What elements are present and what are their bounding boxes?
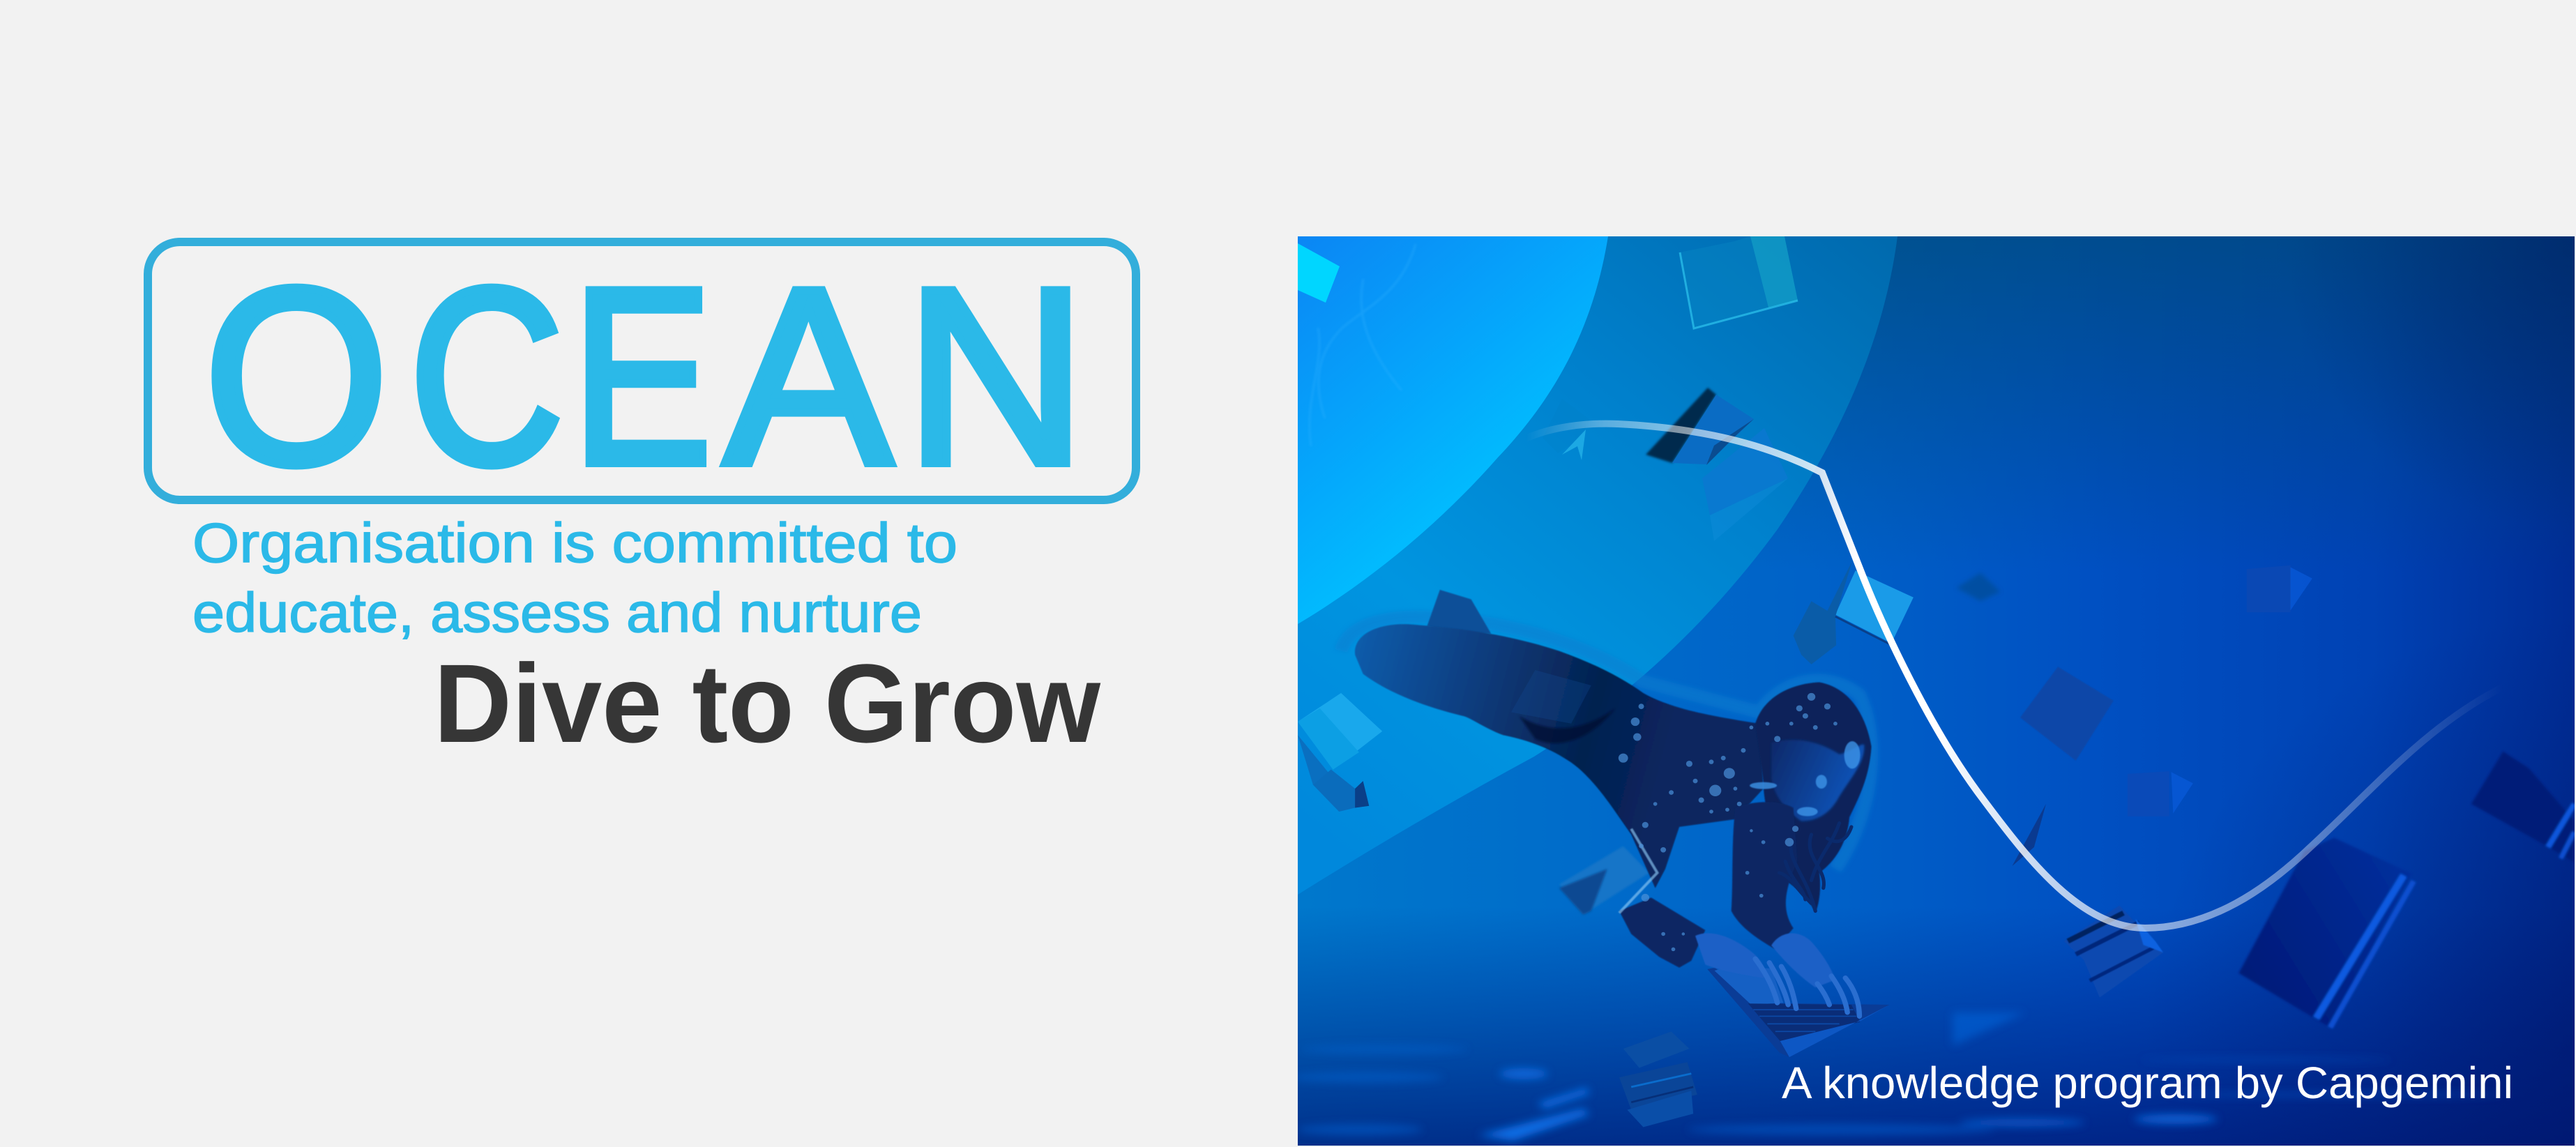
icon: faint book shard [1562, 430, 1586, 460]
caption: knowledge program: A knowledge program by Capgemini [1782, 1058, 2513, 1108]
swimmer legs and torso [1355, 624, 1764, 888]
water background [1298, 236, 2575, 1146]
logo wordmark: N [905, 236, 1086, 517]
striped book at curve [2064, 906, 2163, 998]
icon: book near hip [1559, 846, 1649, 915]
dark book far right [2471, 752, 2574, 863]
logo frame [148, 242, 1136, 500]
logo wordmark: A [725, 236, 893, 517]
tagline text: educate, assess and nurture [192, 582, 922, 644]
big book [2238, 838, 2414, 1028]
light caustic veins [1310, 244, 1416, 446]
hair curls [1780, 823, 1851, 911]
swimmer hair [1755, 683, 1872, 913]
swimmer near arm [1732, 802, 1797, 949]
thin book [2013, 804, 2046, 866]
swimmer fingers [1755, 959, 1859, 1016]
blurred far book [1957, 573, 2000, 601]
icon: cyan book top-left [1298, 243, 1340, 303]
book edge by swimmer [1619, 829, 1658, 913]
icon: book right of curve [1794, 561, 1914, 664]
logo wordmark: O [204, 236, 388, 517]
square book mid [2128, 771, 2169, 816]
swimmer hands [1695, 933, 1835, 987]
band: light disc [1298, 236, 1608, 624]
square book top [2247, 565, 2290, 612]
swimmer shirt patch [1511, 670, 1591, 724]
icon: laptop top [1645, 386, 1788, 515]
square book large [2020, 667, 2114, 761]
icon: outlined book top [1680, 236, 1798, 328]
illustration: swimmer [1341, 590, 1889, 1057]
swimmer far arm [1619, 897, 1705, 968]
swimmer face [1771, 740, 1864, 821]
logo wordmark [204, 236, 1086, 517]
swimmer foot [1427, 590, 1491, 634]
swimmer dark waist shading [1519, 708, 1615, 743]
logo wordmark: C [409, 236, 563, 517]
icons: drifting books right [1957, 565, 2574, 1028]
tagline text [192, 512, 957, 644]
swimmer glow [1341, 617, 1872, 869]
bubbles on swimmer [1619, 693, 1838, 951]
icon: open book left [1298, 693, 1382, 812]
slogan: Dive to Grow: Dive to Grow [434, 641, 1101, 766]
water caustics on floor [1290, 1012, 2503, 1141]
tagline text: Organisation is committed to [192, 512, 957, 574]
icon: stacked books [1619, 1031, 1697, 1127]
logo: OCEAN in rounded frame [148, 236, 1136, 517]
growth curve line [1526, 424, 2503, 928]
swimmer face highlights [1750, 741, 1861, 816]
logo wordmark: E [572, 236, 712, 517]
panel: underwater scene [1290, 236, 2575, 1146]
laptop under hands [1707, 966, 1889, 1057]
band: mid water arc [1298, 236, 1897, 895]
